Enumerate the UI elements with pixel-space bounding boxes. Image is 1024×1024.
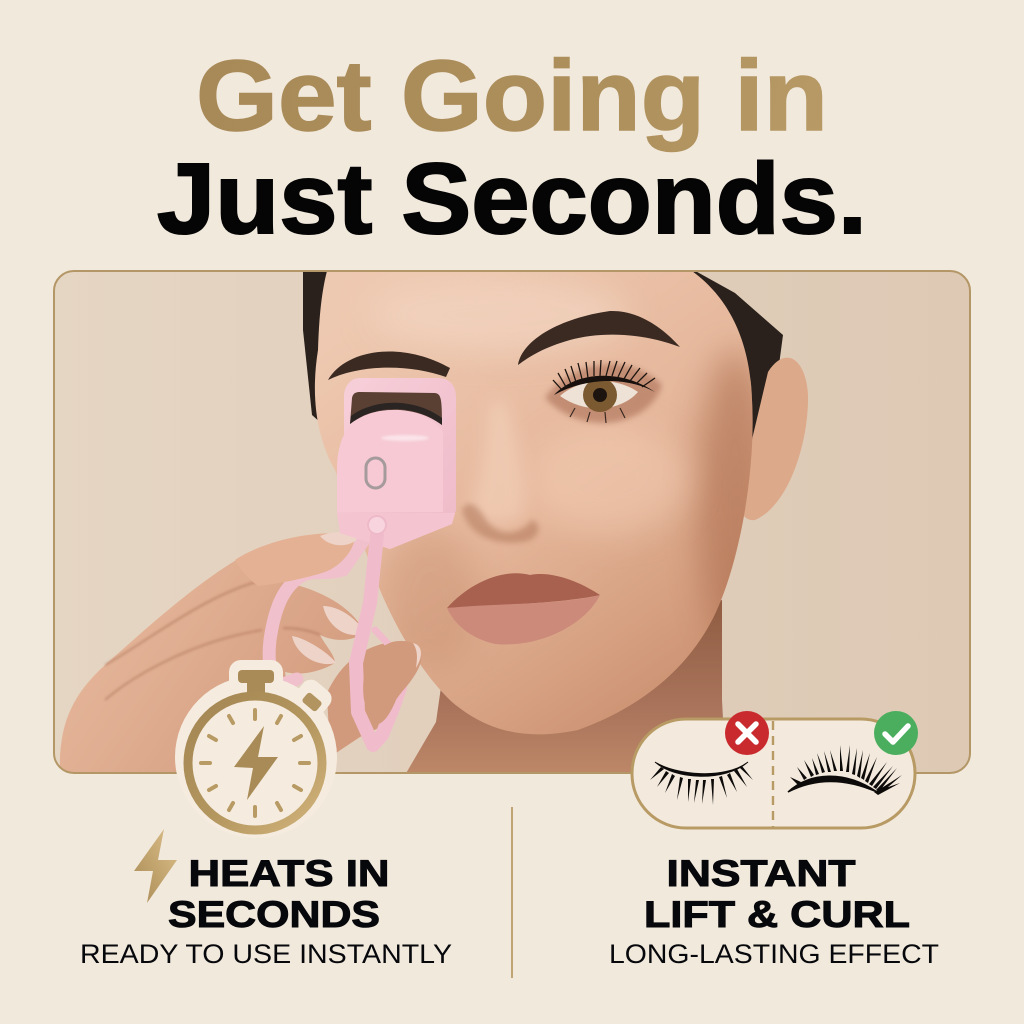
title: Get Going in (196, 40, 828, 152)
palm and fingers (60, 555, 365, 775)
text block: instant lift and curl: LIFT & CURL (644, 894, 910, 935)
nose (462, 504, 538, 543)
lips (447, 573, 600, 644)
icon: stopwatch with lightning bolt (175, 660, 337, 838)
text block: instant lift and curl: INSTANT (666, 853, 856, 894)
text block: instant lift and curl: LONG-LASTING EFFECT (609, 939, 939, 969)
text block: heats in seconds: SECONDS (168, 894, 380, 935)
text block: heats in seconds: READY TO USE INSTANTLY (80, 939, 452, 969)
panel: photo of woman using heated eyelash curler (54, 268, 970, 775)
face (315, 271, 753, 734)
eye (545, 360, 662, 423)
icon: red cross badge (725, 711, 769, 755)
thumb base (328, 644, 385, 752)
eyebrows (328, 311, 680, 380)
icon: small lash (650, 762, 753, 805)
hand (60, 555, 365, 775)
text block: heats in seconds: HEATS IN (188, 853, 390, 894)
icon: long lash (788, 745, 902, 795)
title: Just Seconds. (157, 143, 867, 255)
finger creases (105, 578, 320, 700)
hair (303, 268, 783, 440)
ear (739, 358, 808, 520)
index finger (235, 533, 354, 586)
curler handle front (356, 516, 400, 745)
icon: before and after lashes (632, 711, 918, 828)
curler loop handle (269, 527, 373, 684)
icon: small lightning bolt (134, 829, 177, 903)
thumb front (363, 641, 421, 724)
divider (511, 807, 513, 978)
photo frame (54, 271, 970, 773)
face shading (370, 277, 773, 670)
icon: green check badge (874, 711, 918, 755)
title (157, 40, 867, 255)
neck (405, 600, 726, 775)
fingernails (292, 532, 365, 664)
curler head (337, 378, 456, 549)
text block: instant lift and curl (609, 853, 939, 969)
text block: heats in seconds (80, 853, 452, 969)
